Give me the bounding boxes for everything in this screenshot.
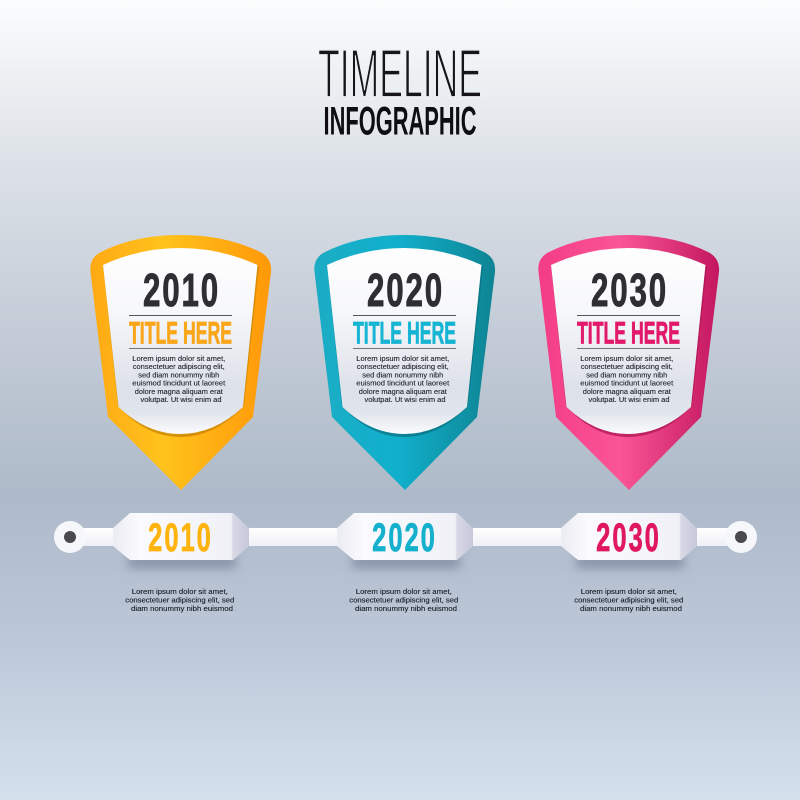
2010 marker xyxy=(113,513,249,568)
shield inner shadow xyxy=(327,250,483,437)
rule top xyxy=(129,315,232,316)
marker year: 2030 xyxy=(596,516,661,561)
marker body xyxy=(113,513,249,560)
marker year: 2010 xyxy=(148,516,213,561)
timeline xyxy=(54,513,757,568)
body text: dolore magna aliquam erat xyxy=(583,387,672,396)
body text: euismod tincidunt ut laoreet xyxy=(356,379,450,388)
heading: TITLE HERE xyxy=(577,314,680,350)
body text: sed diam nonummy nibh xyxy=(586,370,667,379)
caption: 2030: Lorem ipsum dolor sit amet, xyxy=(581,587,677,596)
body text: consectetuer adipiscing elit, xyxy=(357,362,449,371)
right end cap xyxy=(725,521,757,553)
rule top xyxy=(577,315,680,316)
caption: 2010: Lorem ipsum dolor sit amet, xyxy=(132,587,228,596)
year: 2010 xyxy=(143,265,220,317)
rule top xyxy=(353,315,456,316)
title line: INFOGRAPHIC: INFOGRAPHIC xyxy=(324,100,476,144)
shield outer xyxy=(538,235,719,490)
body text: volutpat. Ut wisi enim ad xyxy=(588,395,670,404)
caption: 2020: diam nonummy nibh euismod xyxy=(355,604,457,613)
body text: consectetuer adipiscing elit, xyxy=(133,362,225,371)
timeline bar xyxy=(70,528,741,546)
marker shadow xyxy=(576,556,684,568)
body text: dolore magna aliquam erat xyxy=(135,387,224,396)
body text: sed diam nonummy nibh xyxy=(362,370,443,379)
year: 2030 xyxy=(591,265,668,317)
marker body xyxy=(561,513,697,560)
title line: TIMELINE: TIMELINE xyxy=(318,35,482,112)
heading: TITLE HERE xyxy=(353,314,456,350)
shield outer xyxy=(90,235,271,490)
shield inner xyxy=(551,248,706,434)
body text: volutpat. Ut wisi enim ad xyxy=(364,395,446,404)
body text: Lorem ipsum dolor sit amet, xyxy=(356,354,449,363)
shield outer xyxy=(314,235,495,490)
panel: 2020 shield xyxy=(314,235,495,490)
shield inner shadow xyxy=(551,250,707,437)
left end dot xyxy=(64,531,76,543)
body text: euismod tincidunt ut laoreet xyxy=(132,379,226,388)
2020 marker xyxy=(337,513,473,568)
right end dot xyxy=(735,531,747,543)
caption: 2010: consectetuer adipiscing elit, sed xyxy=(125,596,234,604)
year: 2020 xyxy=(367,265,444,317)
title xyxy=(318,35,482,144)
marker shadow xyxy=(352,556,460,568)
body text: Lorem ipsum dolor sit amet, xyxy=(580,354,673,363)
marker year: 2020 xyxy=(372,516,437,561)
shield inner xyxy=(103,248,258,434)
body text: volutpat. Ut wisi enim ad xyxy=(140,395,222,404)
body text: dolore magna aliquam erat xyxy=(359,387,448,396)
body text: consectetuer adipiscing elit, xyxy=(581,362,673,371)
shield inner shadow xyxy=(103,250,259,437)
body text: sed diam nonummy nibh xyxy=(138,370,219,379)
left end cap xyxy=(54,521,86,553)
caption: 2030: diam nonummy nibh euismod xyxy=(580,604,682,613)
body text: Lorem ipsum dolor sit amet, xyxy=(132,354,225,363)
caption: 2030: consectetuer adipiscing elit, sed xyxy=(574,596,683,604)
heading: TITLE HERE xyxy=(129,314,232,350)
caption: 2020: Lorem ipsum dolor sit amet, xyxy=(356,587,452,596)
caption: 2010: diam nonummy nibh euismod xyxy=(131,604,233,613)
rule bottom xyxy=(129,348,232,349)
shield inner xyxy=(327,248,482,434)
marker shadow xyxy=(128,556,236,568)
panel: 2030 shield xyxy=(538,235,719,490)
marker body xyxy=(337,513,473,560)
rule bottom xyxy=(577,348,680,349)
panel: 2010 shield xyxy=(90,235,271,490)
rule bottom xyxy=(353,348,456,349)
body text: euismod tincidunt ut laoreet xyxy=(580,379,674,388)
caption: 2020: consectetuer adipiscing elit, sed xyxy=(349,596,458,604)
2030 marker xyxy=(561,513,697,568)
